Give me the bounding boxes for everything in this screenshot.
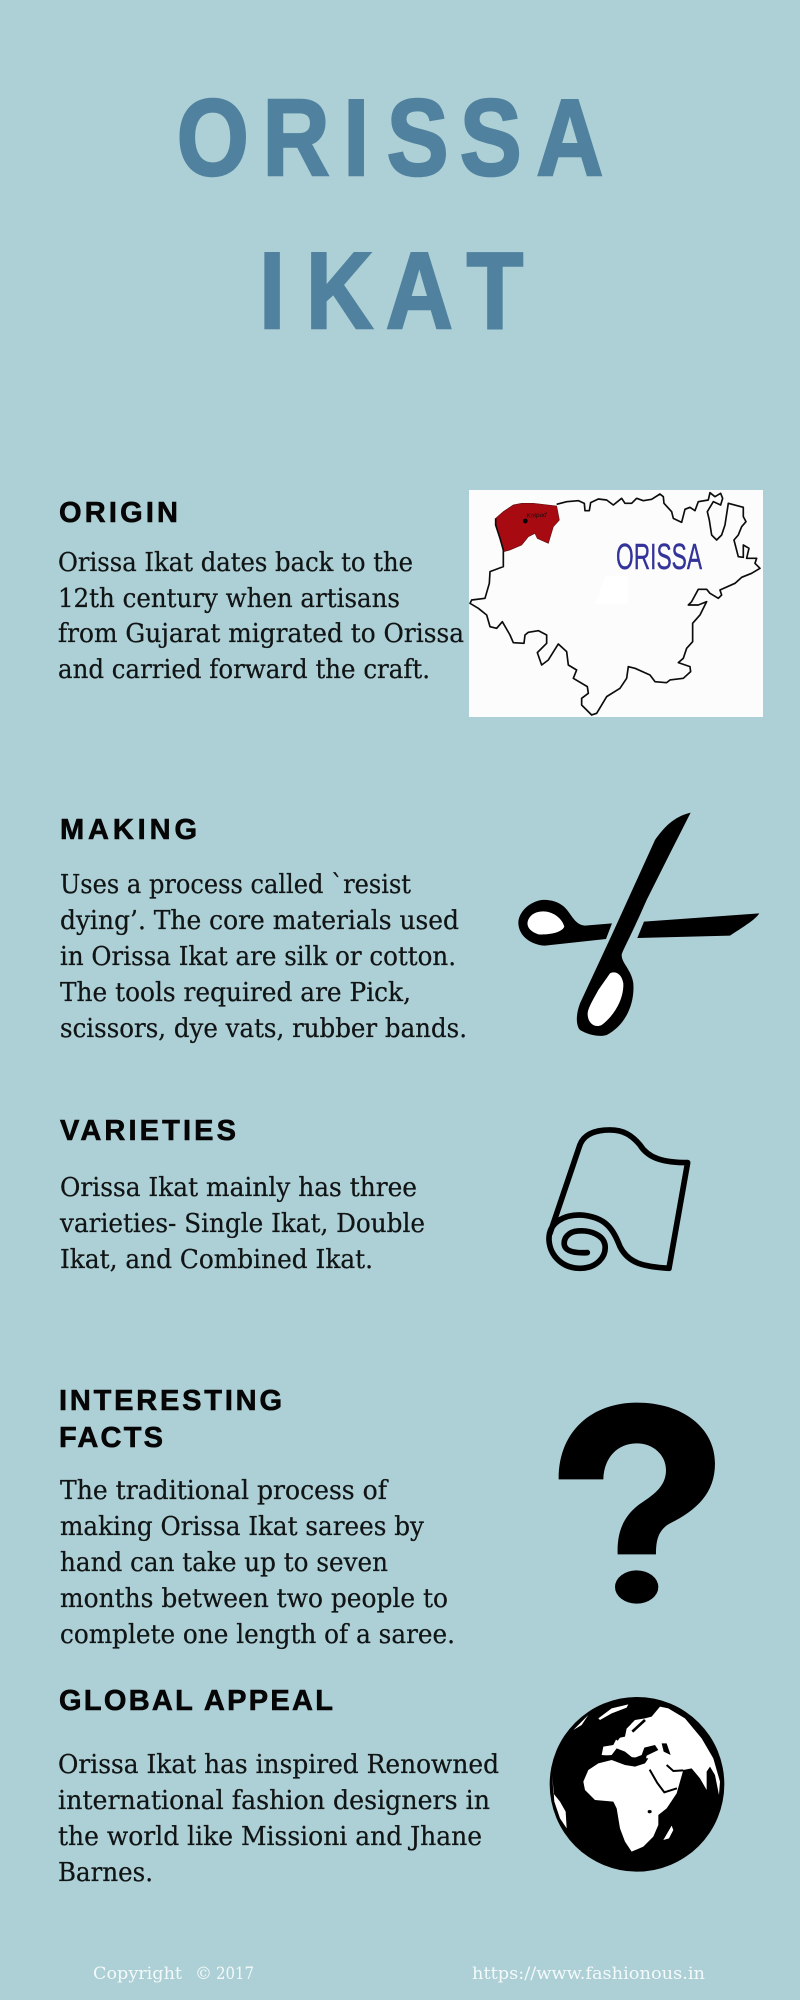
footer: copyright: Copyright xyxy=(93,1964,182,1984)
heading: making: MAKING xyxy=(60,814,197,846)
footer: website: https://www.fashionous.in xyxy=(472,1964,705,1984)
text block: making: scissors, dye vats, rubber bands. xyxy=(60,1014,467,1044)
panel: origin xyxy=(58,490,763,717)
text block: origin: and carried forward the craft. xyxy=(58,655,430,685)
map of Orissa: ORISSA xyxy=(616,536,702,577)
text block: varieties: varieties- Single Ikat, Double xyxy=(59,1209,425,1239)
text block: origin xyxy=(58,548,464,685)
title: IKAT xyxy=(259,230,523,352)
text block: varieties: Ikat, and Combined Ikat. xyxy=(60,1245,373,1275)
heading: interesting facts: FACTS xyxy=(59,1422,163,1454)
panel: making xyxy=(60,813,759,1044)
footer: copyright: © xyxy=(195,1964,212,1984)
text block: interesting facts: complete one length of a saree. xyxy=(60,1620,455,1650)
title xyxy=(177,77,603,352)
text block: varieties xyxy=(59,1173,425,1275)
heading: interesting facts xyxy=(59,1385,282,1454)
text block: global appeal: Barnes. xyxy=(58,1858,153,1888)
text block: varieties: Orissa Ikat mainly has three xyxy=(60,1173,417,1203)
title: ORISSA xyxy=(177,77,603,199)
footer: copyright xyxy=(93,1964,254,1984)
text block: origin: 12th century when artisans xyxy=(58,584,400,614)
text block: global appeal xyxy=(58,1750,499,1888)
text block: making: dying’. The core materials used xyxy=(60,906,459,936)
text block: interesting facts xyxy=(60,1476,455,1650)
icon: globe xyxy=(550,1697,724,1872)
text block: origin: from Gujarat migrated to Orissa xyxy=(58,619,464,649)
footer: copyright: 2017 xyxy=(216,1964,254,1984)
text block: making: Uses a process called `resist xyxy=(60,870,411,900)
text block: origin: Orissa Ikat dates back to the xyxy=(58,548,413,578)
text block: interesting facts: making Orissa Ikat sarees by xyxy=(60,1512,424,1542)
panel: global appeal xyxy=(58,1685,724,1888)
text block: global appeal: Orissa Ikat has inspired Renowned xyxy=(58,1750,499,1780)
icon: question mark xyxy=(559,1403,715,1604)
text block: interesting facts: months between two people to xyxy=(60,1584,448,1614)
heading: global appeal: GLOBAL APPEAL xyxy=(59,1685,333,1717)
text block: making: in Orissa Ikat are silk or cotton. xyxy=(60,942,456,972)
heading: varieties: VARIETIES xyxy=(60,1115,236,1147)
panel: varieties xyxy=(59,1115,688,1275)
panel: interesting facts xyxy=(59,1385,715,1650)
text block: interesting facts: hand can take up to seven xyxy=(60,1548,388,1578)
text block: making xyxy=(60,870,467,1044)
icon: scissors xyxy=(518,813,759,1036)
text block: global appeal: international fashion designers in xyxy=(58,1786,490,1816)
map of Orissa: Kotpad xyxy=(526,512,547,520)
heading: interesting facts: INTERESTING xyxy=(59,1385,282,1417)
text block: interesting facts: The traditional process of xyxy=(60,1476,389,1506)
map of Orissa xyxy=(469,490,763,717)
heading: origin: ORIGIN xyxy=(59,497,178,529)
text block: global appeal: the world like Missioni and Jhane xyxy=(58,1822,482,1852)
icon: fabric roll xyxy=(549,1130,688,1268)
text block: making: The tools required are Pick, xyxy=(60,978,411,1008)
continents: Africa and Eurasia xyxy=(583,1707,720,1852)
